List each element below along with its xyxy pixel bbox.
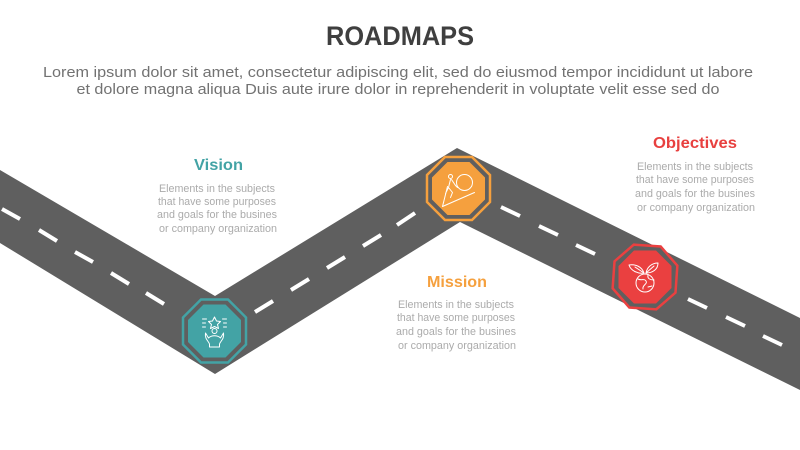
text block: mission: or company organization	[398, 340, 516, 352]
text block: objectives	[635, 135, 755, 214]
text block: mission: that have some purposes	[397, 312, 515, 324]
text block: mission	[396, 274, 516, 352]
text block: vision: that have some purposes	[158, 196, 276, 208]
text block: vision: or company organization	[159, 223, 277, 235]
text block: objectives: Objectives	[653, 135, 737, 152]
text block: mission: Mission	[427, 274, 487, 291]
icon: globe with leaves	[629, 263, 658, 292]
text block: objectives: that have some purposes	[636, 174, 754, 186]
text block: objectives: Elements in the subjects	[637, 161, 753, 173]
icon: person pushing boulder	[442, 174, 474, 206]
text block: mission: Elements in the subjects	[398, 299, 514, 311]
marker: vision octagon	[183, 300, 246, 362]
title: ROADMAPS	[326, 21, 474, 51]
text block: vision: Elements in the subjects	[159, 183, 275, 195]
text block: mission: and goals for the busines	[396, 326, 516, 338]
icon: raised hands with star	[202, 317, 226, 347]
text block: objectives: and goals for the busines	[635, 188, 755, 200]
subtitle text: Lorem ipsum dolor sit amet, consectetur adipiscing elit, sed do eiusmod tempor incididunt ut labore	[43, 64, 753, 81]
marker: objectives octagon	[611, 243, 679, 311]
subtitle text: et dolore magna aliqua Duis aute irure dolor in reprehenderit in voluptate velit esse sed do	[76, 81, 720, 98]
text block: vision	[157, 157, 277, 235]
text block: vision: Vision	[194, 157, 243, 174]
text block: objectives: or company organization	[637, 202, 755, 214]
zigzag road	[0, 148, 800, 390]
marker: mission octagon	[427, 157, 490, 220]
text block: vision: and goals for the busines	[157, 209, 277, 221]
subtitle text	[43, 64, 753, 98]
